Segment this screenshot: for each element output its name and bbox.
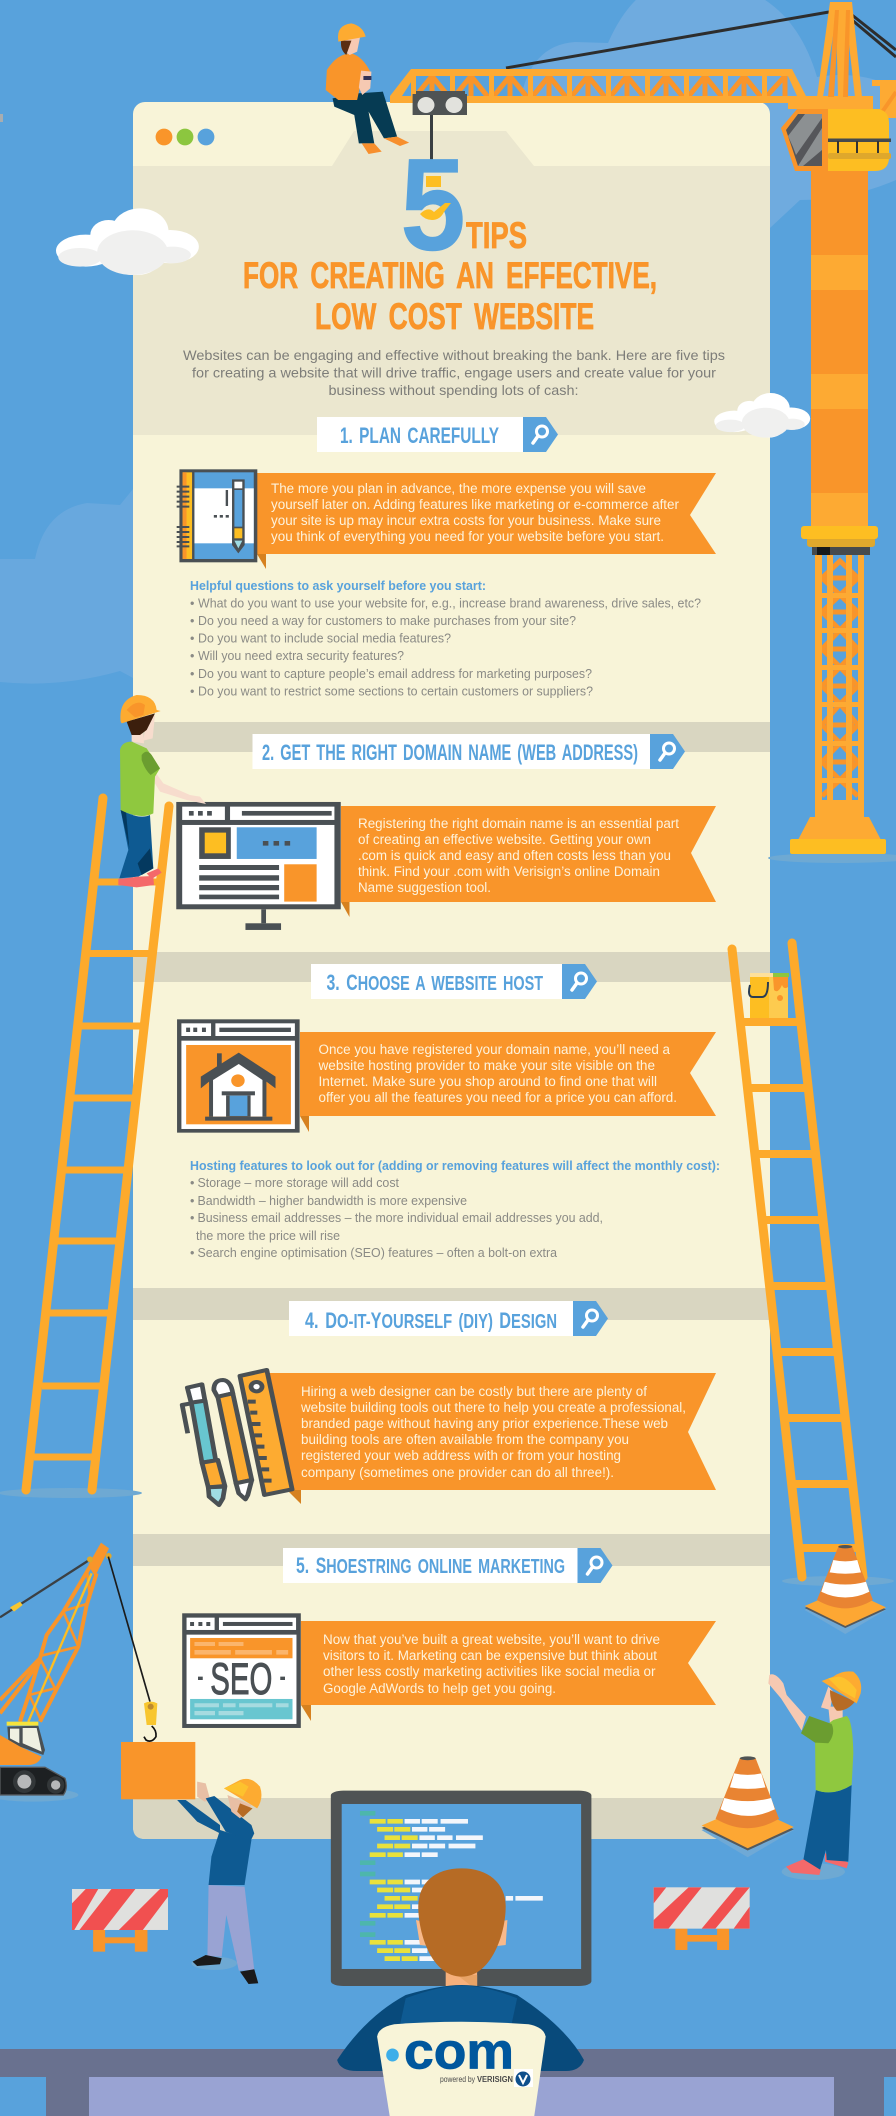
- icon: house in browser: [177, 1019, 300, 1133]
- helpful questions list: •: [190, 684, 194, 698]
- hosting features list: •: [190, 1176, 194, 1190]
- tower crane: [390, 2, 896, 863]
- logo: .com powered by Verisign: VERISIGN: [477, 2075, 513, 2084]
- heading: section 2: [252, 734, 685, 769]
- background cloud: top right: [500, 0, 896, 228]
- icon: magnifier tag: [578, 1548, 612, 1583]
- crane lattice section: [815, 555, 864, 818]
- browser dots: [156, 129, 214, 145]
- icon: pen, pencil and ruler: [182, 1370, 292, 1505]
- helpful questions list: •: [190, 667, 194, 681]
- crane mast: [811, 171, 868, 527]
- helpful questions list: Do you want to capture people’s email address for marketing purposes?: [198, 667, 592, 681]
- heading: section 5: [283, 1548, 612, 1583]
- traffic cone: lower right: [702, 1756, 794, 1857]
- heading: section 2: 2. GET THE RIGHT DOMAIN NAME (WEB ADDRESS): [262, 740, 638, 765]
- worker: lifting block: [177, 1779, 261, 1984]
- section 1 banner: [256, 473, 716, 569]
- ladder: right: [732, 943, 894, 1586]
- section 3 banner: offer you all the features you need for a price you can afford.: [318, 1090, 677, 1105]
- heading: section 5: 5. SHOESTRING ONLINE MARKETING: [296, 1553, 565, 1578]
- section 3 banner: [300, 1032, 716, 1132]
- white cloud: left: [56, 208, 199, 275]
- crane counter jib: [872, 80, 896, 118]
- section 1 banner: you think of everything you need for your website before you start.: [271, 529, 664, 544]
- left edge mark: [0, 114, 3, 122]
- hosting features list: [190, 1159, 720, 1260]
- logo: .com powered by Verisign: [386, 2022, 533, 2087]
- section 5 banner: Now that you’ve built a great website, you’ll want to drive: [323, 1632, 660, 1647]
- crane base: [768, 817, 896, 863]
- hosting features list: •: [190, 1246, 194, 1260]
- crawler crane: [0, 1543, 195, 1802]
- background cloud: left: [0, 489, 133, 684]
- worker: standing on left ladder: [118, 695, 206, 887]
- section 2 banner: Registering the right domain name is an essential part: [358, 816, 679, 831]
- section 3 banner: website hosting provider to make your site visible on the: [317, 1058, 655, 1073]
- crane hook line: [108, 1557, 157, 1741]
- person at computer: [337, 1868, 584, 2116]
- icon: magnifier tag: [562, 964, 597, 999]
- hosting features list: •: [190, 1194, 194, 1208]
- helpful questions list: •: [190, 614, 194, 628]
- intro text: business without spending lots of cash:: [328, 382, 578, 398]
- icon: SEO browser: [182, 1613, 301, 1728]
- tower mast overlap over cloud: [811, 409, 868, 493]
- ladder: left: [0, 798, 169, 1498]
- section 4 banner: Hiring a web designer can be costly but there are plenty of: [301, 1384, 647, 1399]
- barricade: right: [654, 1887, 750, 1950]
- monitor with code: [331, 1791, 591, 1986]
- section 2 banner: think. Find your .com with Verisign’s online Domain: [358, 864, 660, 879]
- heading: section 3: [311, 964, 597, 999]
- section 4 banner: branded page without having any prior experience.These web: [301, 1416, 668, 1431]
- helpful questions list: Do you need a way for customers to make purchases from your site?: [198, 614, 576, 628]
- heading: 5 tips title: FOR CREATING AN EFFECTIVE,: [243, 255, 657, 296]
- icon: notebook and pen: [177, 469, 257, 562]
- heading: section 1: [317, 417, 558, 452]
- crane collar: [801, 526, 878, 555]
- section 4 banner: company (sometimes one provider can do all three!).: [301, 1465, 614, 1480]
- section 2 banner: [341, 806, 716, 917]
- heading: 5 tips title: TIPS: [466, 215, 527, 256]
- traffic cone: upper right: [805, 1545, 886, 1634]
- helpful questions list: What do you want to use your website for, e.g., increase brand awareness, drive sales, etc?: [198, 596, 701, 610]
- orange block: [121, 1742, 195, 1799]
- intro text: [183, 347, 725, 398]
- crane jib: [390, 69, 873, 109]
- icon: magnifier tag: [523, 417, 558, 452]
- panel: browser window: [133, 102, 770, 1839]
- icon: SEO browser: SEO: [210, 1655, 272, 1704]
- logo: .com powered by Verisign: powered by: [440, 2075, 475, 2084]
- crane cables: [506, 12, 896, 68]
- section 4 banner: website building tools out there to help you create a professional,: [300, 1400, 686, 1415]
- section 2 banner: of creating an effective website. Getting your own: [358, 832, 651, 847]
- section 1 banner: yourself later on. Adding features like marketing or e-commerce after: [271, 497, 680, 512]
- crane hook trolley: [413, 91, 467, 160]
- heading: section 4: 4. DO-IT-YOURSELF (DIY) DESIGN: [305, 1308, 557, 1333]
- helpful questions list: Will you need extra security features?: [198, 649, 404, 663]
- hosting features list: the more the price will rise: [196, 1229, 340, 1243]
- heading: 5 tips title: [243, 131, 657, 337]
- intro text: Websites can be engaging and effective without breaking the bank. Here are five tips: [183, 347, 725, 363]
- intro text: for creating a website that will drive traffic, engage users and create value for your: [192, 364, 716, 380]
- helpful questions list: Do you want to include social media features?: [198, 632, 451, 646]
- logo: .com powered by Verisign: com: [404, 2022, 514, 2080]
- hosting features list: Storage – more storage will add cost: [198, 1176, 399, 1190]
- icon: paint bucket: [749, 973, 789, 1018]
- crane cab: [781, 109, 891, 171]
- hosting features list: •: [190, 1211, 194, 1225]
- heading: section 1: 1. PLAN CAREFULLY: [340, 423, 499, 448]
- section 5 banner: visitors to it. Marketing can be expensive but think about: [323, 1648, 657, 1663]
- section 4 banner: [269, 1373, 716, 1504]
- helpful questions list: •: [190, 596, 194, 610]
- code lines: [360, 1811, 543, 1961]
- hosting features list: Search engine optimisation (SEO) features – often a bolt-on extra: [198, 1246, 557, 1260]
- section 3 banner: Internet. Make sure you shop around to find one that will: [318, 1074, 657, 1089]
- section 2 banner: .com is quick and easy and often costs less than you: [358, 848, 671, 863]
- icon: magnifier tag: [573, 1301, 608, 1336]
- section 5 banner: other less costly marketing activities like social media or: [323, 1664, 656, 1679]
- heading: 5 tips title: LOW COST WEBSITE: [315, 296, 594, 337]
- chair back: [377, 2022, 546, 2116]
- white cloud: right: [714, 393, 810, 438]
- barricade: left: [72, 1889, 168, 1952]
- section 1 banner: your site is up may incur extra costs for your business. Make sure: [271, 513, 661, 528]
- section 1 banner: The more you plan in advance, the more expense you will save: [271, 481, 646, 496]
- worker: right, reaching to panel: [768, 1671, 861, 1880]
- desk: [0, 2049, 896, 2116]
- crane top frame: [817, 2, 862, 97]
- helpful questions list: •: [190, 649, 194, 663]
- worker: sitting on window: [326, 23, 409, 154]
- icon: magnifier tag: [650, 734, 685, 769]
- section 3 banner: Once you have registered your domain name, you’ll need a: [318, 1042, 671, 1057]
- hosting features list: Business email addresses – the more individual email addresses you add,: [198, 1211, 603, 1225]
- section 4 banner: building tools are often available from the company you: [301, 1432, 629, 1447]
- section 5 banner: [301, 1621, 716, 1721]
- number 5: 5: [400, 131, 466, 278]
- helpful questions list: Do you want to restrict some sections to certain customers or suppliers?: [198, 684, 593, 698]
- hosting features list: Bandwidth – higher bandwidth is more expensive: [198, 1194, 467, 1208]
- section 5 banner: Google AdWords to help get you going.: [323, 1681, 556, 1696]
- helpful questions list: •: [190, 632, 194, 646]
- helpful questions list: [190, 579, 701, 698]
- heading: section 4: [289, 1301, 608, 1336]
- section 2 banner: Name suggestion tool.: [358, 880, 491, 895]
- section 4 banner: registered your web address with or from your hosting: [301, 1448, 621, 1463]
- helpful questions list: Helpful questions to ask yourself before you start:: [190, 579, 486, 593]
- heading: section 3: 3. CHOOSE A WEBSITE HOST: [326, 970, 543, 995]
- hosting features list: Hosting features to look out for (adding or removing features will affect the monthly cost):: [190, 1159, 720, 1173]
- icon: web page monitor: [176, 802, 341, 930]
